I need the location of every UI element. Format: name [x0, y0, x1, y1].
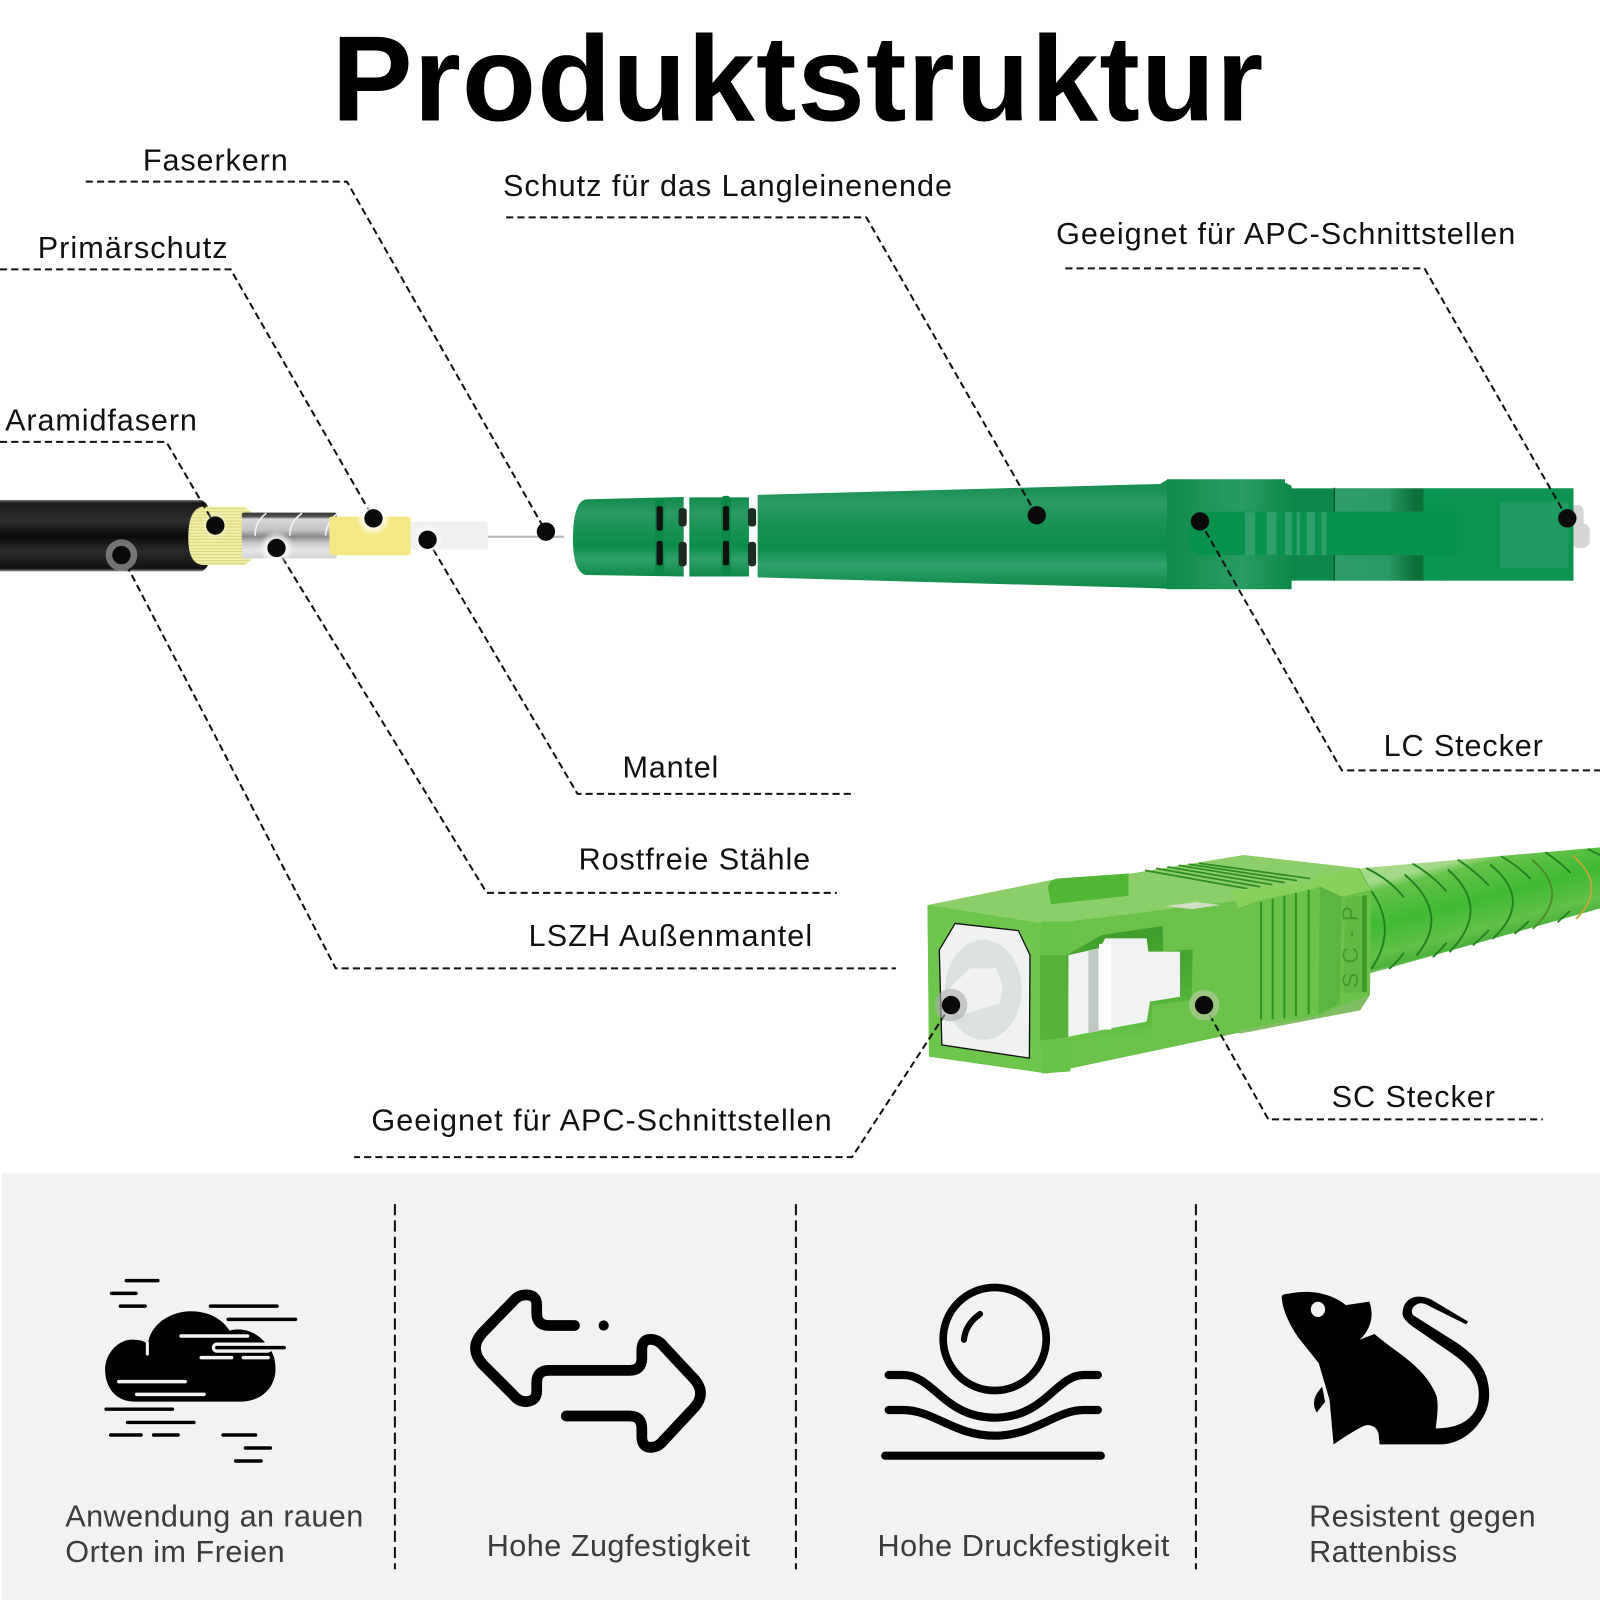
icon: cloud and wind — [105, 1281, 296, 1461]
collar — [1167, 479, 1292, 589]
primary protection yellow — [329, 517, 411, 555]
boot taper — [758, 480, 1167, 589]
top ribs — [1145, 863, 1310, 889]
label plate with SC-P text: SC-P — [1338, 906, 1363, 988]
boot grooves — [655, 496, 756, 577]
label: LSZH Außenmantel: LSZH Außenmantel — [529, 919, 812, 953]
side ribs — [1261, 890, 1309, 1019]
white latch shade — [1088, 949, 1098, 1033]
front section — [1443, 488, 1573, 581]
side latch window frame — [1067, 926, 1193, 1047]
white latch highlight — [1099, 944, 1111, 1030]
icon: tensile arrows — [476, 1295, 701, 1447]
leader lines — [0, 182, 1600, 1157]
label: Geeignet für APC-Schnittstellen (LC): Geeignet für APC-Schnittstellen — [1056, 217, 1515, 251]
inner cavity — [945, 940, 1022, 1040]
latch — [1189, 512, 1457, 555]
latch ribs — [1245, 512, 1327, 555]
shoulder light band — [1232, 868, 1370, 908]
boot ribs — [1367, 849, 1600, 968]
caption: Anwendung an rauen Orten im Freien — [65, 1500, 363, 1569]
LSZH outer jacket — [0, 500, 208, 571]
SC connector — [928, 847, 1600, 1073]
boot segment 2 — [689, 497, 749, 577]
post — [1423, 488, 1443, 581]
caption: Resistent gegen Rattenbiss — [1309, 1500, 1536, 1569]
housing silhouette — [928, 855, 1371, 1073]
caption: Hohe Druckfestigkeit: Hohe Druckfestigkeit — [878, 1529, 1170, 1563]
label: Faserkern: Faserkern — [143, 143, 288, 177]
rear block upper — [1335, 488, 1423, 512]
separator line — [1334, 488, 1335, 581]
caption: Resistent gegen Rattenbiss: Rattenbiss — [1309, 1535, 1457, 1569]
label: Rostfreie Stähle: Rostfreie Stähle — [579, 842, 810, 876]
cable cross-section — [0, 500, 564, 571]
ferrule — [943, 968, 1003, 1013]
LC connector — [573, 479, 1590, 589]
caption: Resistent gegen Rattenbiss: Resistent gegen — [1309, 1500, 1536, 1534]
front opening — [939, 923, 1030, 1058]
stainless steel tube — [242, 513, 338, 558]
label: Aramidfasern: Aramidfasern — [5, 404, 197, 438]
bottom shadow strip — [1237, 995, 1370, 1034]
caption: Anwendung an rauen Orten im Freien: Orten im Freien — [65, 1535, 285, 1569]
connector rear body — [1288, 488, 1573, 581]
label: Primärschutz: Primärschutz — [38, 231, 228, 265]
label: LC Stecker: LC Stecker — [1384, 729, 1543, 763]
fiber core — [488, 536, 564, 538]
icon: pressure — [885, 1287, 1101, 1456]
housing front face — [928, 905, 1043, 1071]
label: Geeignet für APC-Schnittstellen (SC): Geeignet für APC-Schnittstellen — [371, 1104, 832, 1138]
panel: features — [2, 1173, 1600, 1600]
label: Mantel: Mantel — [622, 751, 718, 785]
corner blocks — [1040, 921, 1071, 1073]
top plate mark — [1165, 902, 1220, 909]
boot segment 1 — [573, 497, 684, 577]
top tab — [1048, 873, 1129, 904]
icon: rat — [1282, 1292, 1489, 1444]
rear block lower — [1335, 555, 1423, 581]
housing top face — [928, 855, 1360, 923]
ferrule tip — [1568, 505, 1590, 548]
caption: Anwendung an rauen Orten im Freien: Anwendung an rauen — [65, 1500, 363, 1534]
shoulder face — [1318, 887, 1342, 1015]
title: Produktstruktur — [332, 10, 1263, 146]
white cladding — [411, 522, 488, 549]
green strain relief boot — [1360, 847, 1600, 973]
aramid fibres — [188, 507, 252, 565]
marker dots — [106, 501, 1577, 1021]
panel background — [2, 1173, 1600, 1600]
label: SC Stecker: SC Stecker — [1332, 1080, 1495, 1114]
label: Schutz für das Langleinenende: Schutz für das Langleinenende — [503, 169, 952, 203]
side latch window white — [1068, 938, 1180, 1037]
caption: Hohe Zugfestigkeit: Hohe Zugfestigkeit — [487, 1529, 750, 1563]
front window — [1500, 502, 1568, 568]
